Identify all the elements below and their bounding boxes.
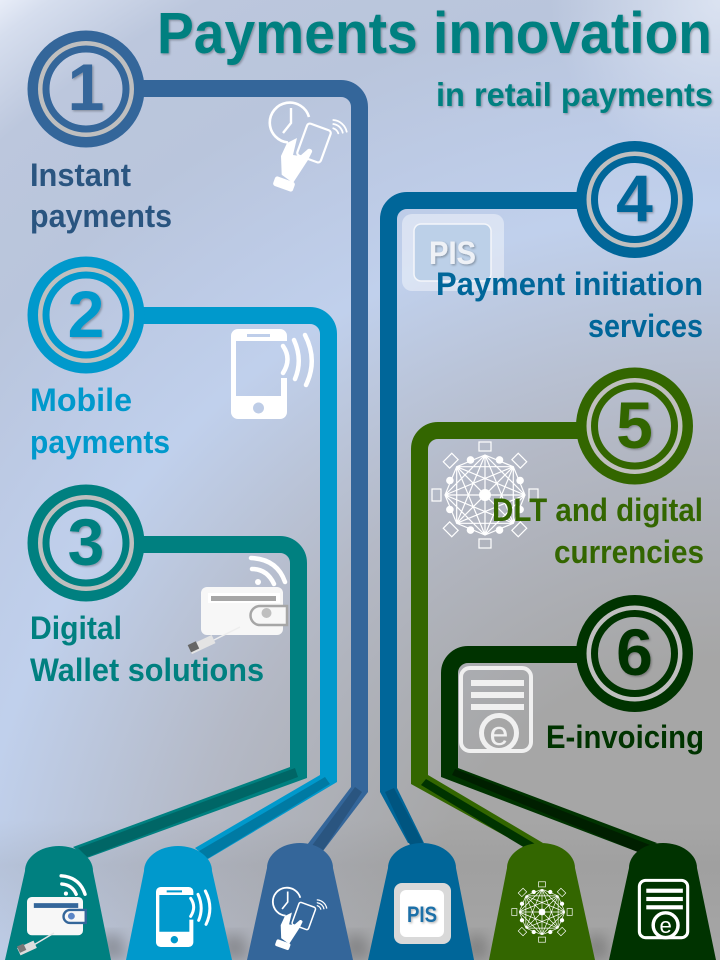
badge 6 xyxy=(582,600,688,706)
icon: invoice xyxy=(461,668,531,753)
line 2 xyxy=(140,316,328,776)
icon: wallet xyxy=(188,558,287,654)
label: DLT and digital currencies xyxy=(492,492,704,570)
badge 4 xyxy=(582,146,688,252)
icon: invoice: e xyxy=(490,715,508,753)
base: DLT xyxy=(489,843,595,960)
icon: network small xyxy=(512,882,572,942)
base: mobile xyxy=(126,846,232,960)
badge 6: 6 xyxy=(616,615,653,689)
icon: hand small xyxy=(273,888,327,951)
icon: phone xyxy=(231,329,312,419)
base: digital wallet xyxy=(5,846,111,960)
icon: invoice small: e xyxy=(659,913,672,938)
icon: PIS xyxy=(402,214,504,291)
icon: wallet small xyxy=(27,876,86,935)
icon: phone small xyxy=(156,887,210,947)
label: payment initiation services xyxy=(436,266,703,344)
badge 3: 3 xyxy=(68,505,104,579)
label: digital wallet solutions: Wallet solutions xyxy=(30,652,264,688)
route lines xyxy=(140,88,580,789)
badge 1 xyxy=(33,36,139,142)
line 4 xyxy=(388,200,580,789)
icon: usb plug small xyxy=(17,933,54,955)
label: mobile payments: Mobile xyxy=(30,382,132,418)
label: instant payments: Instant xyxy=(30,157,131,193)
icon: network xyxy=(432,442,538,548)
label: mobile payments xyxy=(30,382,170,460)
label: digital wallet solutions: Digital xyxy=(30,610,122,646)
line 1 xyxy=(140,88,360,788)
diagonal connectors xyxy=(73,767,657,859)
badge 2: 2 xyxy=(68,277,104,351)
label: digital wallet solutions xyxy=(30,610,264,688)
line 6 xyxy=(450,654,580,769)
label: payment initiation services: Payment initiation xyxy=(436,266,703,302)
label: DLT and digital currencies: DLT and digital xyxy=(492,492,703,528)
badge 5: 5 xyxy=(616,388,653,462)
icon: clock hand card xyxy=(270,103,347,192)
base: e-invoicing xyxy=(609,843,716,960)
base: instant xyxy=(247,843,353,960)
label: instant payments: payments xyxy=(30,198,172,234)
label: DLT and digital currencies: currencies xyxy=(554,534,704,570)
badge 1: 1 xyxy=(68,50,104,124)
base: PIS xyxy=(368,843,474,960)
line 5 xyxy=(420,430,580,776)
label: mobile payments: payments xyxy=(30,424,170,460)
badge 3 xyxy=(33,490,139,596)
icon: PIS small: PIS xyxy=(407,902,437,927)
subtitle: in retail payments xyxy=(436,76,713,113)
icon: PIS: PIS xyxy=(429,235,476,271)
label: instant payments xyxy=(30,157,172,234)
label: payment initiation services: services xyxy=(588,308,703,344)
line 3 xyxy=(140,544,298,768)
label: e-invoicing: E-invoicing xyxy=(546,719,704,755)
badge 5 xyxy=(582,373,688,479)
base shadows xyxy=(100,935,610,960)
badge 4: 4 xyxy=(616,161,653,235)
badge 2 xyxy=(33,262,139,368)
